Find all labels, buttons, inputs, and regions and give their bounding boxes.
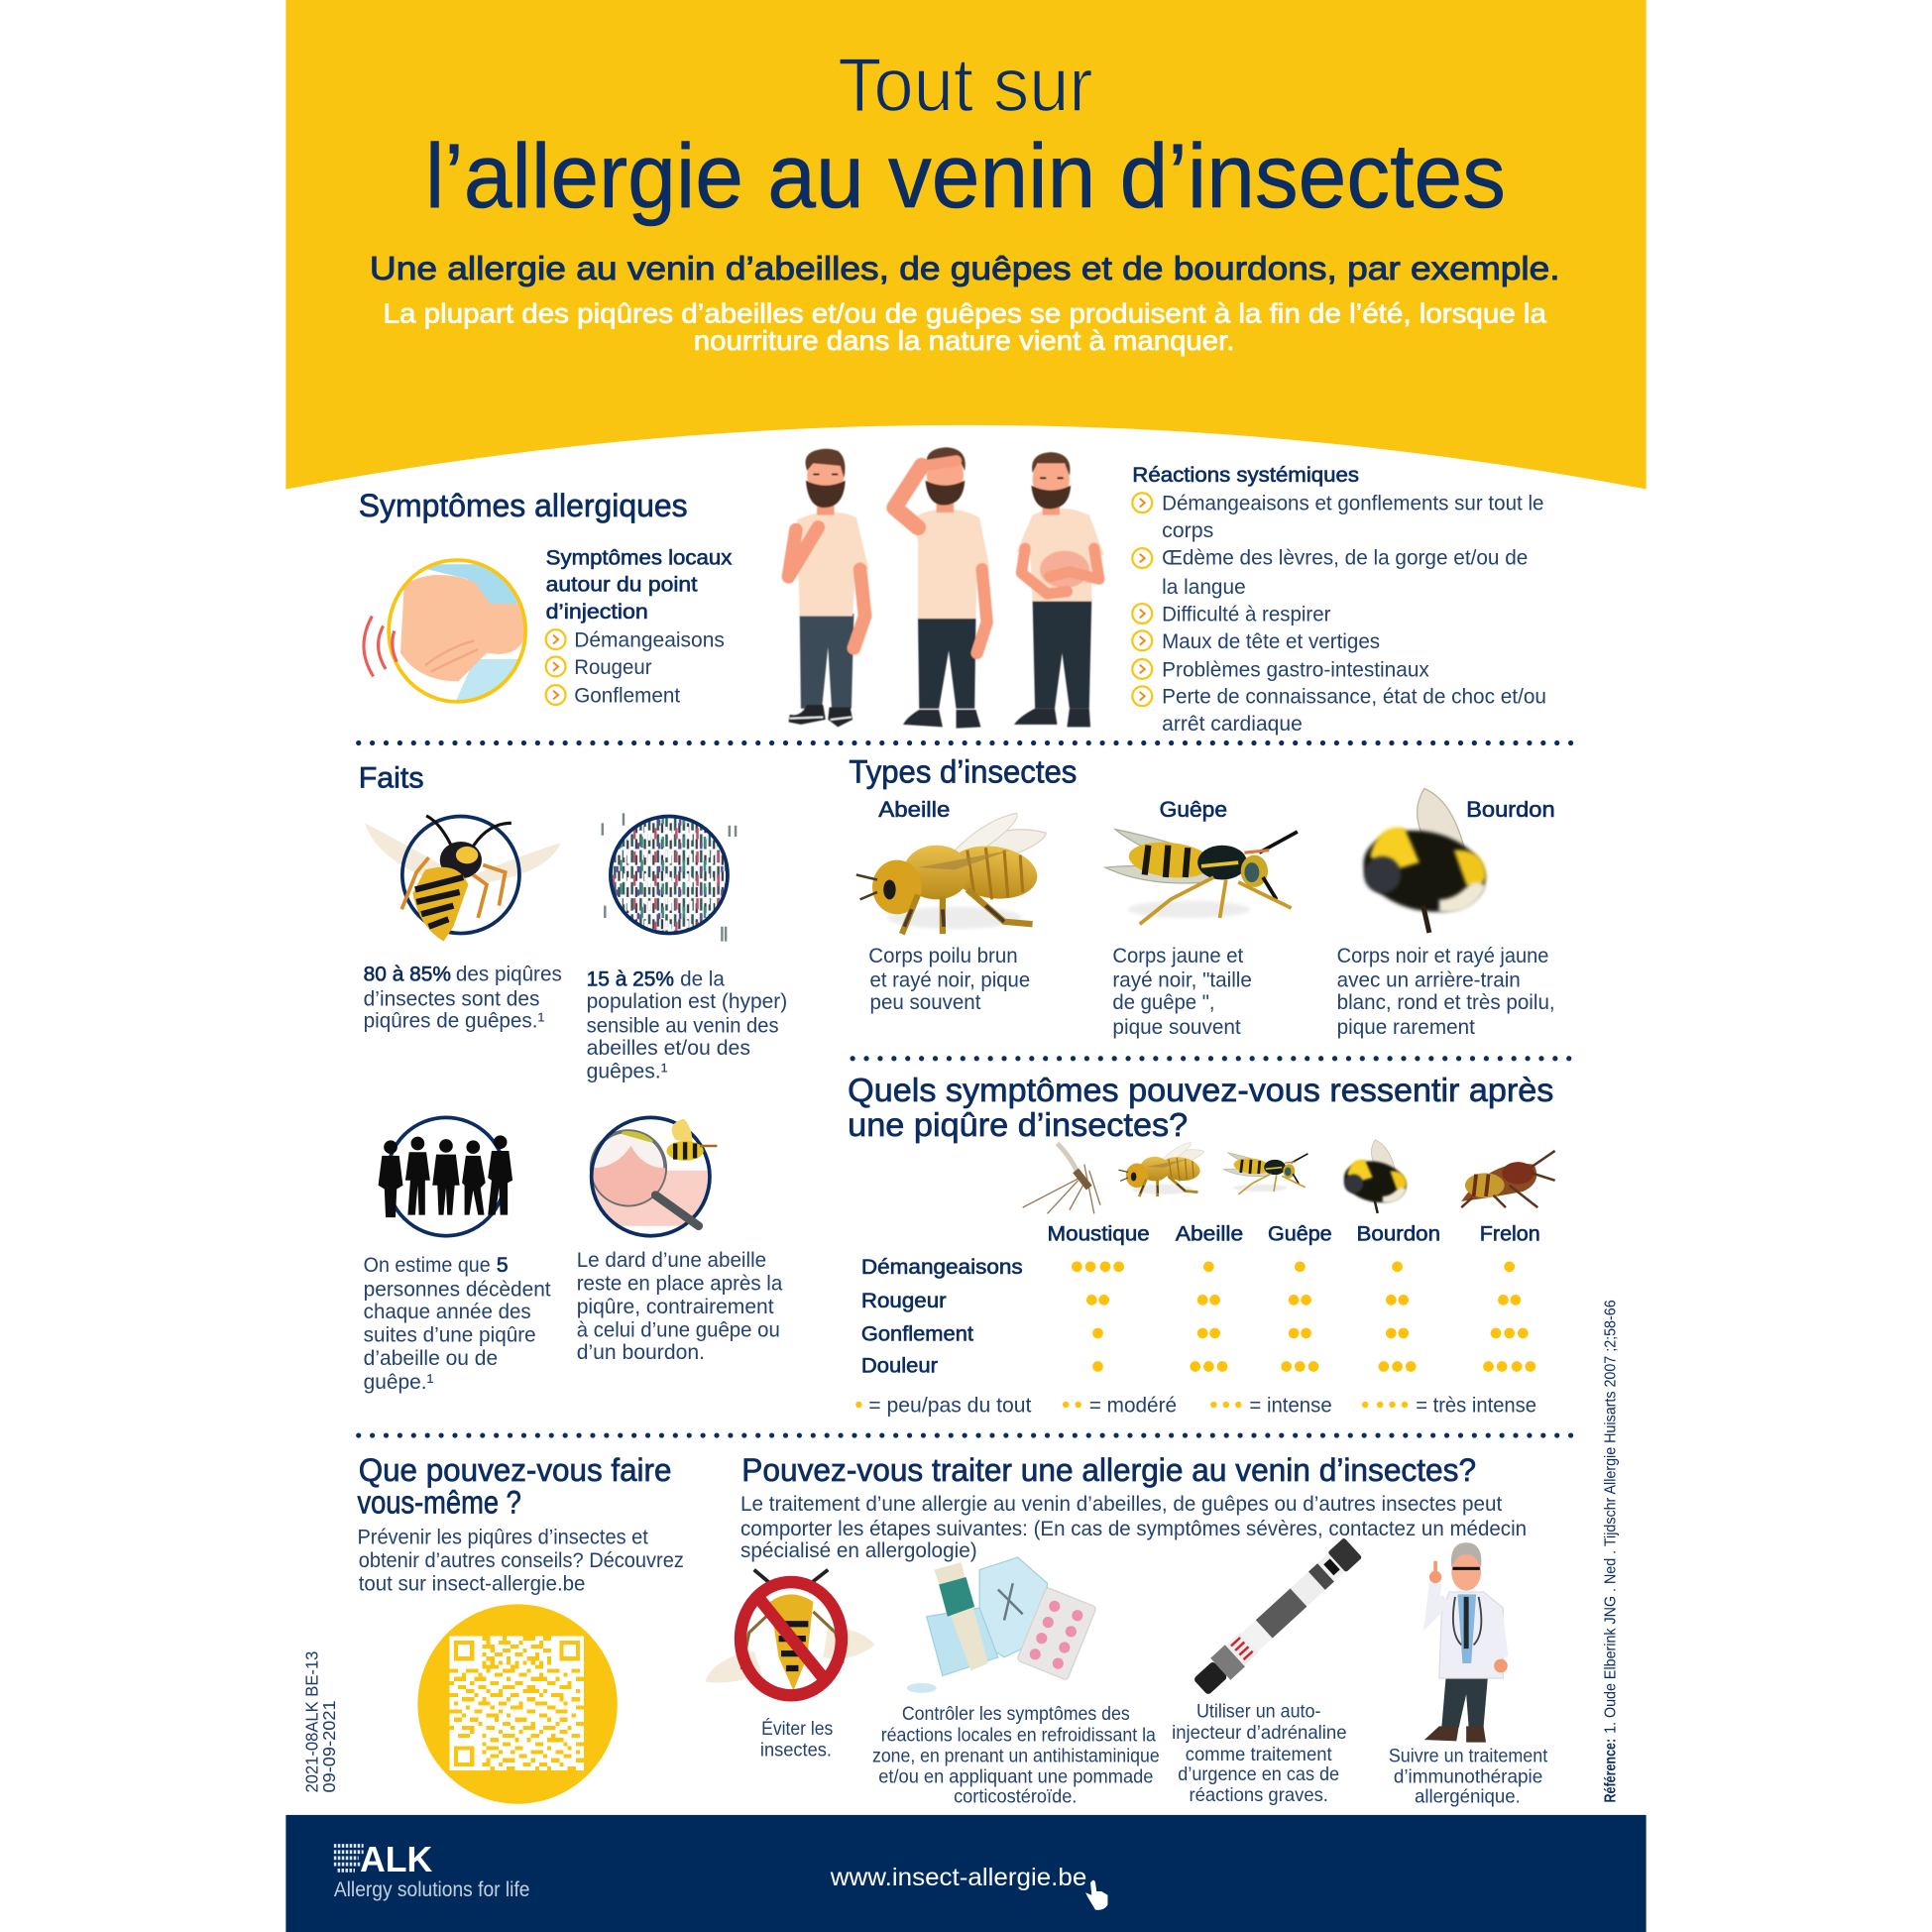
- advice text: tout sur insect-allergie.be: [359, 1573, 585, 1596]
- step 1: éviter: insectes.: [760, 1740, 832, 1761]
- footer band: [285, 1815, 1647, 1932]
- reference note: Référence:: [1603, 1739, 1620, 1802]
- local symptoms list: Gonflement: [574, 685, 680, 708]
- treatment intro text: Le traitement d’une allergie au venin d’abeilles, de guêpes ou d’autres insectes peut: [740, 1493, 1502, 1516]
- ALK logo: [334, 1839, 529, 1901]
- heading: symptômes allergiques: Symptômes allergiques: [359, 488, 688, 523]
- fact 3 text: d’abeille ou de: [364, 1347, 498, 1370]
- subtitle: Une allergie au venin d’abeilles, de guêpes et de bourdons, par exemple.: [370, 251, 1560, 287]
- table column headers: [1048, 1223, 1540, 1246]
- fact 4 text: piqûre, contrairement: [577, 1296, 774, 1318]
- local symptoms list: Rougeur: [574, 656, 652, 679]
- fact 1 text: 80 à 85%: [364, 963, 451, 985]
- fact 2 text: abeilles et/ou des: [587, 1037, 750, 1060]
- fact 3 text: chaque année des: [364, 1301, 531, 1323]
- fact 3 text: 5: [497, 1254, 509, 1277]
- legend: = intense: [1249, 1394, 1332, 1417]
- panel: systemic reactions: Démangeaisons et gonflements sur tout le: [1162, 493, 1543, 515]
- fact 3 text: On estime que: [364, 1254, 491, 1277]
- side code and date: 2021-08ALK BE-13: [302, 1651, 322, 1793]
- table column headers: Moustique: [1048, 1223, 1150, 1246]
- bee: abeille: peu souvent: [870, 991, 981, 1014]
- heading: que pouvez-vous faire: Que pouvez-vous faire: [359, 1452, 671, 1488]
- table row labels: [861, 1256, 1023, 1378]
- local symptoms list: [546, 546, 733, 708]
- step 3: auto-injecteur: injecteur d’adrénaline: [1172, 1723, 1347, 1744]
- step 3: auto-injecteur: comme traitement: [1186, 1745, 1332, 1765]
- step 2: contrôler: et/ou en appliquant une pommade: [878, 1767, 1153, 1788]
- intro text: [384, 298, 1546, 356]
- step 4: médecin: d’immunothérapie: [1394, 1767, 1542, 1788]
- step 3: auto-injecteur: [1172, 1536, 1363, 1806]
- step 1: éviter: [705, 1570, 875, 1761]
- panel: systemic reactions: Difficulté à respirer: [1162, 603, 1330, 625]
- icon: five silhouettes in circle: [379, 1117, 512, 1236]
- local symptoms list: d’injection: [546, 601, 648, 624]
- bumblebee: bourdon: pique rarement: [1337, 1016, 1475, 1039]
- title: Tout sur: [838, 43, 1093, 128]
- fact 4 text: reste en place après la: [577, 1272, 783, 1295]
- table column headers: Abeille: [1176, 1223, 1243, 1246]
- intro text: nourriture dans la nature vient à manquer.: [694, 325, 1234, 356]
- bumblebee: bourdon: Corps noir et rayé jaune: [1337, 945, 1548, 967]
- heading: quels symptômes: une piqûre d’insectes?: [848, 1107, 1188, 1144]
- table column headers: Frelon: [1480, 1223, 1540, 1246]
- step 2: contrôler: réactions locales en refroidissant la: [881, 1725, 1156, 1746]
- QR code in yellow circle: [417, 1604, 618, 1804]
- side code and date: 09-09-2021: [319, 1700, 339, 1793]
- fact 4 text: d’un bourdon.: [577, 1341, 705, 1364]
- fact 1 text: d’insectes sont des: [364, 987, 539, 1010]
- advice text: [357, 1526, 684, 1596]
- wasp: guêpe: rayé noir, "taille: [1112, 969, 1252, 992]
- step 3: auto-injecteur: Utiliser un auto-: [1196, 1702, 1320, 1723]
- heading: pouvez-vous traiter: Pouvez-vous traiter une allergie au venin d’insectes?: [741, 1452, 1476, 1488]
- step 1: éviter: Éviter les: [761, 1719, 833, 1740]
- step 4: médecin: [1389, 1542, 1548, 1807]
- severity dots: [1072, 1261, 1535, 1372]
- step 4: médecin: Suivre un traitement: [1389, 1746, 1548, 1766]
- ALK logo: Allergy solutions for life: [334, 1878, 529, 1901]
- panel: symptômes allergiques: [359, 488, 733, 708]
- fact 2 text: sensible au venin des: [587, 1015, 779, 1038]
- panel: systemic reactions: [1132, 464, 1546, 736]
- panel: systemic reactions: la langue: [1162, 576, 1246, 599]
- fact 2 text: de la: [680, 967, 725, 990]
- icon: crowd in circle: [603, 813, 736, 942]
- legend: = très intense: [1416, 1394, 1536, 1417]
- panel: systemic reactions: arrêt cardiaque: [1162, 713, 1303, 736]
- man 3: [1014, 452, 1104, 727]
- fact 3 text: guêpe.¹: [364, 1371, 434, 1394]
- wasp: guêpe: de guêpe ",: [1112, 991, 1215, 1014]
- fact 4 text: à celui d’une guêpe ou: [577, 1319, 780, 1342]
- table row labels: Démangeaisons: [861, 1256, 1023, 1279]
- reference note: 1. Oude Elberink JNG . Ned . Tijdschr Allergie Huisarts 2007 ;2;58-66: [1603, 1300, 1620, 1734]
- panel: types d'insectes: [849, 753, 1555, 1039]
- fact 3 text: personnes décèdent: [364, 1279, 551, 1302]
- panel: systemic reactions: Réactions systémiques: [1132, 464, 1359, 487]
- step 2: contrôler: [872, 1557, 1160, 1807]
- side code and date: [302, 1651, 339, 1793]
- heading: quels symptômes: Quels symptômes pouvez-vous ressentir après: [848, 1073, 1553, 1109]
- panel: traitement: [705, 1452, 1548, 1807]
- man 1: [789, 449, 868, 727]
- bee: abeille: et rayé noir, pique: [870, 969, 1030, 992]
- wasp: guêpe: [1105, 797, 1298, 1039]
- fact 4 text: [577, 1249, 783, 1364]
- step 4: médecin: allergénique.: [1415, 1786, 1521, 1807]
- fact 3 text: [364, 1254, 551, 1394]
- icon: magnifier on stinger: [592, 1117, 717, 1236]
- wasp: guêpe: Guêpe: [1160, 797, 1227, 822]
- panel: systemic reactions: Perte de connaissance, état de choc et/ou: [1162, 686, 1546, 709]
- heading: que pouvez-vous faire: vous-même ?: [357, 1484, 521, 1520]
- advice text: obtenir d’autres conseils? Découvrez: [359, 1549, 684, 1572]
- step 2: contrôler: zone, en prenant un antihistaminique: [872, 1746, 1160, 1766]
- panel: symptom table: [848, 1073, 1555, 1417]
- treatment intro text: spécialisé en allergologie): [740, 1539, 977, 1562]
- fact 3 text: suites d’une piqûre: [364, 1324, 536, 1347]
- intro text: La plupart des piqûres d’abeilles et/ou de guêpes se produisent à la fin de l’été, lorsque la: [384, 298, 1546, 329]
- table row labels: Douleur: [861, 1355, 938, 1378]
- heading: quels symptômes: [848, 1073, 1553, 1144]
- local symptoms list: Symptômes locaux: [546, 546, 733, 569]
- fact 4 text: Le dard d’une abeille: [577, 1249, 766, 1272]
- panel: faits: [359, 761, 787, 1394]
- fact 1 text: [364, 963, 562, 1033]
- table row labels: Rougeur: [861, 1290, 947, 1312]
- table column headers: Bourdon: [1357, 1223, 1440, 1246]
- icon: wasp in circle: [365, 816, 561, 942]
- legend: = modéré: [1089, 1394, 1177, 1417]
- bumblebee: bourdon: Bourdon: [1466, 797, 1555, 822]
- website url: www.insect-allergie.be: [830, 1865, 1086, 1891]
- small insect icons row: [1023, 1140, 1555, 1213]
- panel: systemic reactions: Maux de tête et vertiges: [1162, 630, 1380, 653]
- title: l’allergie au venin d’insectes: [425, 126, 1506, 227]
- step 3: auto-injecteur: d’urgence en cas de: [1178, 1764, 1339, 1785]
- title: [425, 43, 1506, 227]
- heading: types d'insectes: Types d’insectes: [849, 753, 1077, 789]
- step 2: contrôler: corticostéroïde.: [954, 1786, 1077, 1807]
- local symptoms list: autour du point: [546, 574, 698, 597]
- panel: systemic reactions: Problèmes gastro-intestinaux: [1162, 658, 1429, 681]
- man 2: [894, 447, 989, 729]
- fact 2 text: guêpes.¹: [587, 1061, 668, 1083]
- bee: abeille: Abeille: [878, 797, 950, 822]
- table column headers: Guêpe: [1268, 1223, 1332, 1246]
- table row labels: Gonflement: [861, 1322, 973, 1345]
- fact 2 text: 15 à 25%: [587, 967, 674, 990]
- local symptoms list: Démangeaisons: [574, 629, 725, 652]
- treatment intro text: comporter les étapes suivantes: (En cas de symptômes sévères, contactez un médecin: [740, 1518, 1527, 1540]
- bumblebee: bourdon: blanc, rond et très poilu,: [1337, 991, 1555, 1014]
- bee: abeille: Corps poilu brun: [868, 945, 1018, 967]
- ALK logo: ALK: [360, 1839, 432, 1879]
- panel: systemic reactions: Œdème des lèvres, de la gorge et/ou de: [1162, 546, 1528, 569]
- bumblebee: bourdon: [1337, 789, 1555, 1039]
- icon: hand with sting: [364, 560, 526, 702]
- heading: faits: Faits: [359, 761, 424, 794]
- panel: systemic reactions: corps: [1162, 519, 1213, 542]
- fact 1 text: des piqûres: [456, 963, 562, 985]
- wasp: guêpe: Corps jaune et: [1112, 945, 1243, 967]
- step 3: auto-injecteur: réactions graves.: [1189, 1785, 1328, 1806]
- fact 1 text: piqûres de guêpes.¹: [364, 1010, 544, 1033]
- fact 2 text: [587, 967, 787, 1083]
- heading: que pouvez-vous faire: [357, 1452, 671, 1520]
- advice text: Prévenir les piqûres d’insectes et: [357, 1526, 648, 1548]
- fact 2 text: population est (hyper): [587, 990, 787, 1013]
- treatment intro text: [740, 1493, 1527, 1562]
- wasp: guêpe: pique souvent: [1112, 1016, 1241, 1039]
- panel: que pouvez-vous faire: [357, 1452, 684, 1804]
- step 2: contrôler: Contrôler les symptômes des: [902, 1704, 1130, 1725]
- header yellow band: [285, 0, 1647, 489]
- legend: [855, 1394, 1536, 1417]
- bee: abeille: [856, 797, 1046, 1014]
- icon: hand cursor: [1085, 1880, 1107, 1910]
- illustration: three men with symptoms: [789, 447, 1104, 729]
- bumblebee: bourdon: avec un arrière-train: [1337, 969, 1521, 992]
- legend: = peu/pas du tout: [868, 1394, 1032, 1417]
